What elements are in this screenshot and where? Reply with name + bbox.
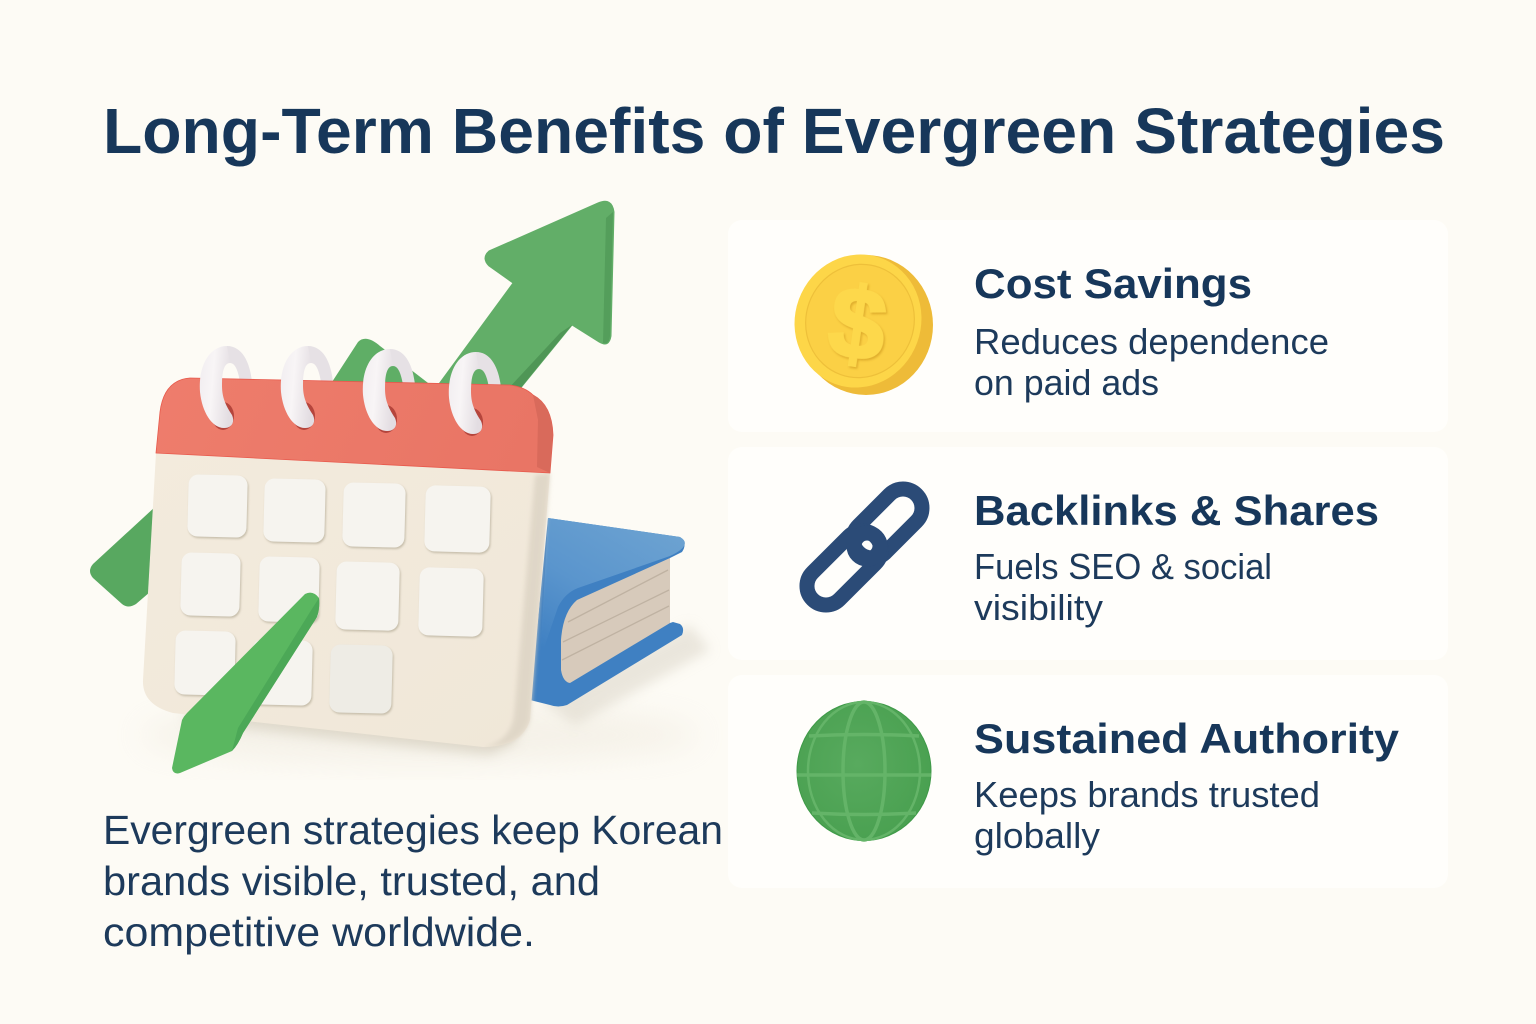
rings back half	[227, 346, 501, 388]
calendar date cells	[174, 474, 491, 714]
heading: Cost Savings	[974, 260, 1252, 307]
description: Reduces dependence	[974, 321, 1329, 362]
calendar red header	[156, 378, 553, 473]
description: globally	[974, 815, 1100, 856]
description: on paid ads	[974, 362, 1159, 403]
caption text: brands visible, trusted, and	[103, 858, 600, 904]
caption text: Evergreen strategies keep Korean	[103, 807, 723, 853]
icon: gold coin	[776, 236, 940, 406]
icon: blue book	[530, 518, 685, 706]
calendar body	[143, 453, 550, 747]
ground shadow	[140, 625, 710, 763]
caption text	[103, 807, 723, 955]
ring holes	[212, 402, 483, 436]
calendar right side shading	[483, 473, 550, 747]
description: visibility	[974, 587, 1103, 628]
icon: green arrow in front	[172, 593, 319, 773]
icon: gold coin: $	[822, 265, 893, 383]
panel: cost savings	[728, 220, 1448, 432]
header right side shade	[533, 395, 553, 473]
icon: green globe	[797, 702, 931, 840]
heading: Backlinks & Shares	[974, 487, 1379, 534]
illustration: calendar, book and growth arrow	[90, 201, 710, 773]
rings front half	[200, 346, 482, 434]
description	[974, 546, 1272, 628]
panel: backlinks and shares	[728, 447, 1448, 660]
description	[974, 321, 1329, 403]
caption text: competitive worldwide.	[103, 909, 535, 955]
title: Long-Term Benefits of Evergreen Strategies	[103, 95, 1445, 167]
icon: chain link	[799, 481, 930, 613]
panel: sustained authority	[728, 675, 1448, 888]
description: Fuels SEO & social	[974, 546, 1272, 587]
heading: Sustained Authority	[974, 715, 1400, 762]
description	[974, 774, 1320, 856]
icon: green growth arrow behind calendar	[90, 201, 614, 607]
icon: calendar	[143, 346, 553, 747]
description: Keeps brands trusted	[974, 774, 1320, 815]
